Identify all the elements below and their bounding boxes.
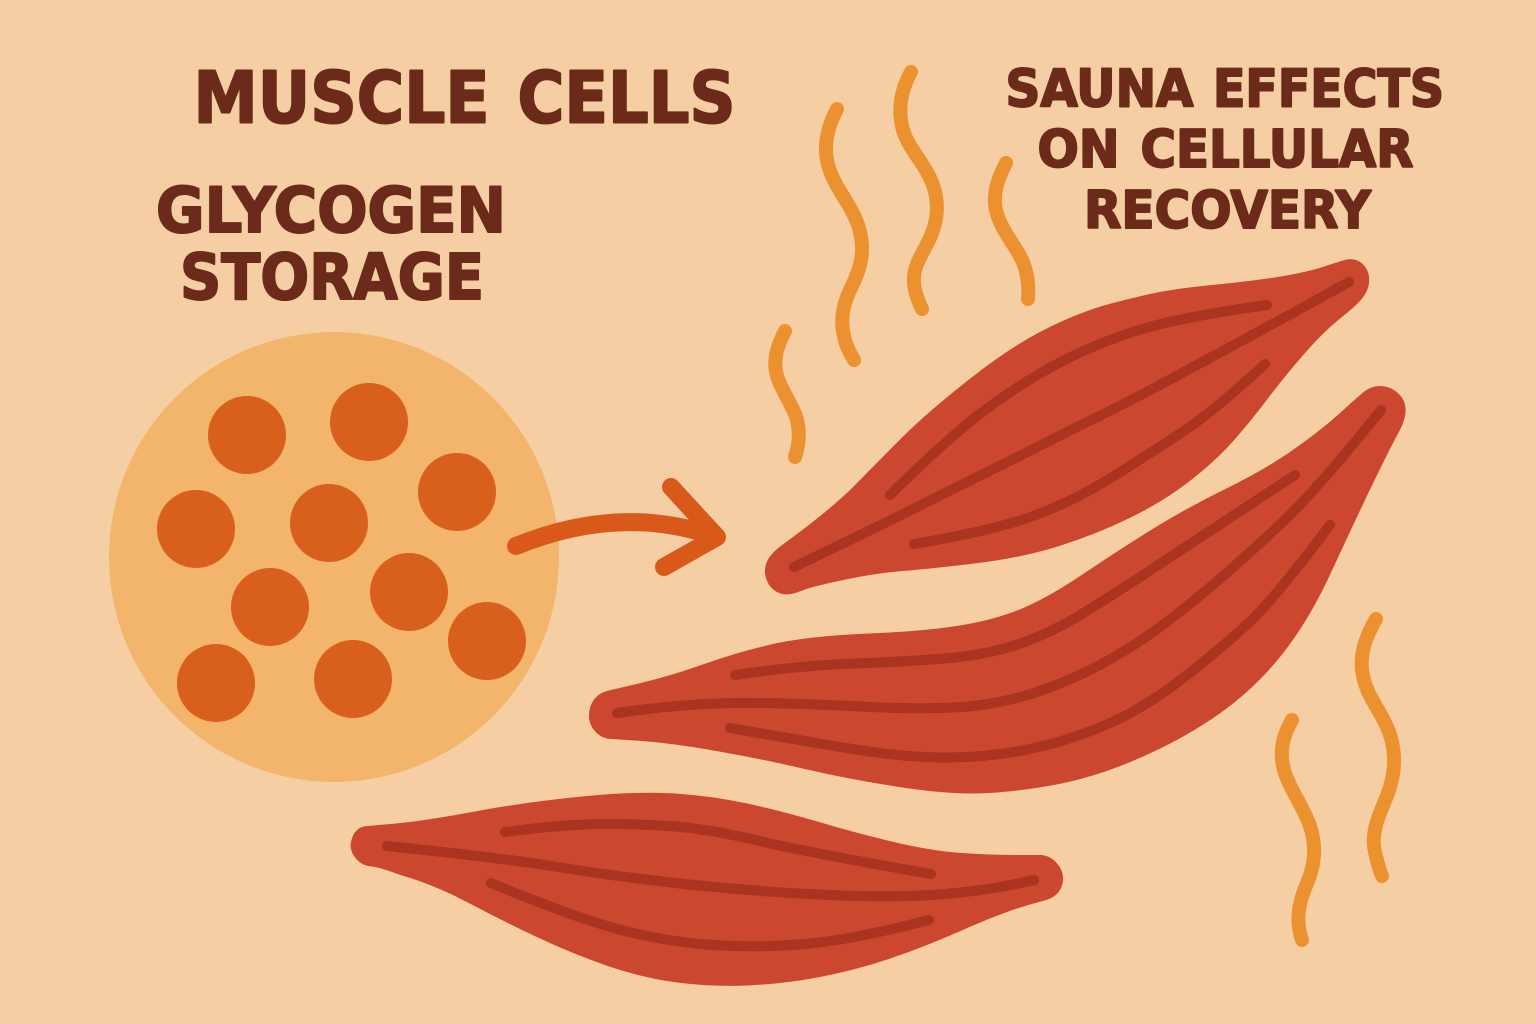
title: muscle cells <box>194 56 736 140</box>
heading: sauna effects on cellular recovery <box>1006 60 1444 241</box>
muscle fiber: middle <box>590 387 1405 793</box>
heading: sauna effects on cellular recovery: SAUNA <box>1006 60 1194 120</box>
heading: glycogen storage <box>156 174 506 314</box>
cell body <box>109 332 559 782</box>
glycogen granules <box>157 383 526 722</box>
title: muscle cells: MUSCLE <box>194 56 490 140</box>
heat waves: upper group <box>775 72 1028 457</box>
heading: glycogen storage: GLYCOGEN <box>156 174 506 247</box>
heading: sauna effects on cellular recovery: ON <box>1038 120 1120 180</box>
glycogen cell <box>109 332 559 782</box>
muscle fiber: lower <box>352 794 1062 985</box>
heading: sauna effects on cellular recovery: RECOVERY <box>1084 181 1372 241</box>
arrow <box>516 487 717 567</box>
heading: glycogen storage: STORAGE <box>180 241 484 314</box>
heat waves: lower group <box>1282 619 1394 940</box>
muscle fiber: upper <box>766 260 1368 593</box>
heading: sauna effects on cellular recovery: EFFECTS <box>1213 60 1444 120</box>
title: muscle cells: CELLS <box>518 56 736 140</box>
heading: sauna effects on cellular recovery: CELLULAR <box>1140 120 1414 180</box>
